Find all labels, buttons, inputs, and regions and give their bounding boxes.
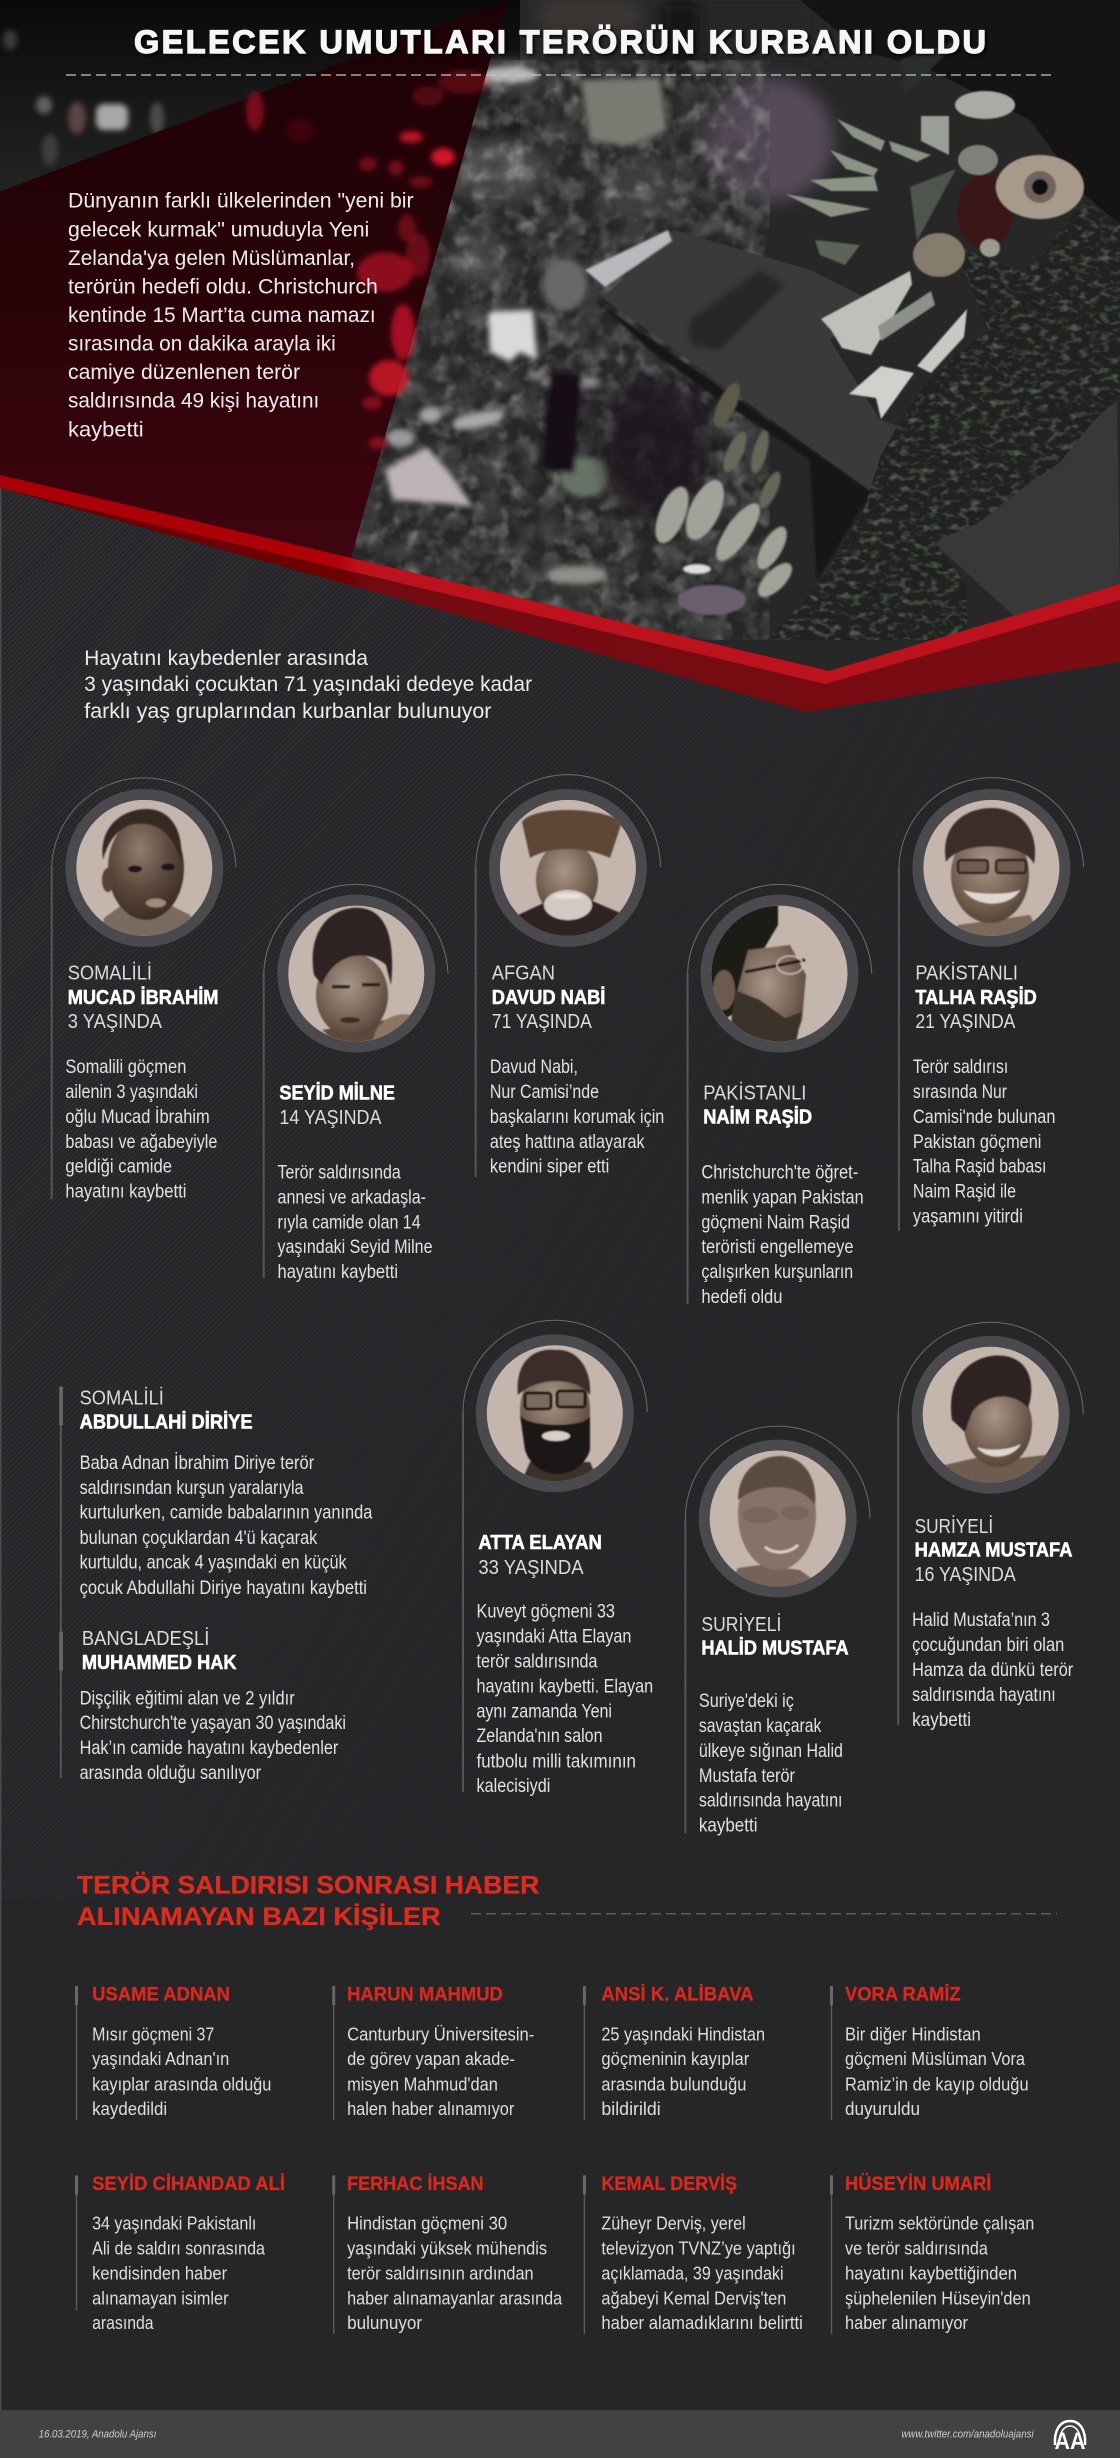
icon: Anadolu Ajansı logo: AA <box>1054 2428 1086 2455</box>
dark railing top right <box>800 0 1120 225</box>
stone bench surface <box>603 230 910 494</box>
description: Hamza Mustafa: Hamza da dünkü terör <box>912 1659 1074 1681</box>
card: Seyid Milne <box>264 884 448 1283</box>
description: Talha Raşid: sırasında Nur <box>913 1081 1007 1103</box>
subheading text: 3 yaşındaki çocuktan 71 yaşındaki dedeye kadar <box>84 673 532 696</box>
intro text block <box>68 190 414 441</box>
missing: Ferhac İhsan: haber alınamayanlar arasında <box>347 2288 563 2308</box>
card: Abdullahi Diriye: ABDULLAHİ DİRİYE <box>80 1410 253 1434</box>
description: Hamza Mustafa: çocuğundan biri olan <box>912 1634 1064 1656</box>
portrait: Mucad İbrahim <box>101 808 192 936</box>
missing: Vora Ramiz: Bir diğer Hindistan <box>845 2024 981 2044</box>
description: Mucad İbrahim: Somalili göçmen <box>65 1056 186 1078</box>
lower red chevron band <box>0 488 1120 712</box>
missing: Kemal Derviş <box>583 2174 803 2334</box>
description: Muhammed Hak: arasında olduğu sanılıyor <box>80 1762 261 1784</box>
footer bar: www.twitter.com/anadoluajansi <box>901 2428 1034 2440</box>
name block: Halid Mustafa <box>701 1613 849 1660</box>
missing: Hüseyin Umari: şüphelenilen Hüseyin'den <box>845 2288 1031 2308</box>
missing: Seyid Cihandad Ali: Ali de saldırı sonrasında <box>92 2238 266 2258</box>
name block: Mucad İbrahim: 3 YAŞINDA <box>68 1011 163 1033</box>
description: Atta Elayan: yaşındaki Atta Elayan <box>476 1626 631 1648</box>
description: Naim Raşid: çalışırken kurşunların <box>701 1261 853 1283</box>
mottled blur texture <box>350 60 770 640</box>
red translucent triangle <box>0 0 507 562</box>
missing: Ansi K. Alibava: bildirildi <box>601 2099 661 2119</box>
description: Abdullahi Diriye <box>80 1451 373 1599</box>
missing: Seyid Cihandad Ali: alınamayan isimler <box>92 2288 229 2308</box>
description: Atta Elayan: aynı zamanda Yeni <box>476 1700 612 1722</box>
description: Naim Raşid: hedefi oldu <box>701 1286 782 1308</box>
subheading text: farklı yaş gruplarından kurbanlar bulunuyor <box>84 700 491 723</box>
name block: Atta Elayan: 33 YAŞINDA <box>478 1557 584 1579</box>
intro text block: kentinde 15 Mart’ta cuma namazı <box>68 304 376 327</box>
fern foliage <box>767 201 1120 640</box>
description: Atta Elayan: futbolu milli takımının <box>476 1750 636 1772</box>
missing: Seyid Cihandad Ali <box>75 2174 285 2333</box>
missing: Ferhac İhsan: bulunuyor <box>347 2313 422 2333</box>
name block: Davud Nabi: 71 YAŞINDA <box>492 1011 592 1033</box>
missing: Ferhac İhsan: FERHAC İHSAN <box>347 2174 484 2195</box>
intro text block: terörün hedefi oldu. Christchurch <box>68 276 378 299</box>
intro text block: gelecek kurmak" umuduyla Yeni <box>68 218 369 242</box>
footer bar <box>0 2410 1120 2458</box>
card: Davud Nabi <box>476 775 664 1178</box>
missing: Harun Mahmud <box>332 1985 534 2120</box>
name block: Halid Mustafa: SURİYELİ <box>701 1613 781 1636</box>
description: Mucad İbrahim: ailenin 3 yaşındaki <box>65 1081 198 1103</box>
portrait: Naim Raşid <box>708 905 806 1048</box>
name block: Mucad İbrahim <box>68 962 218 1033</box>
name block: Atta Elayan <box>478 1532 602 1579</box>
name block: Seyid Milne: SEYİD MİLNE <box>279 1081 395 1104</box>
missing: Harun Mahmud: de görev yapan akade- <box>347 2049 515 2069</box>
portrait: Seyid Milne <box>312 906 410 1042</box>
dark flower mass <box>603 378 707 522</box>
missing: Usame Adnan: Mısır göçmeni 37 <box>92 2024 214 2044</box>
title: GELECEK UMUTLARI TERÖRÜN KURBANI OLDU <box>134 24 986 60</box>
missing: Vora Ramiz: göçmeni Müslüman Vora <box>845 2049 1026 2069</box>
card: Mucad İbrahim <box>52 778 236 1202</box>
missing: Kemal Derviş: açıklamada, 39 yaşındaki <box>601 2264 784 2284</box>
missing: Ansi K. Alibava <box>583 1985 765 2120</box>
upper red chevron band <box>0 475 1120 684</box>
description: Talha Raşid: Pakistan göçmeni <box>913 1131 1041 1153</box>
name block: Mucad İbrahim: MUCAD İBRAHİM <box>68 986 218 1009</box>
description: Abdullahi Diriye: bulunan çoçuklardan 4'ü kaçarak <box>80 1527 318 1549</box>
missing: Seyid Cihandad Ali: SEYİD CİHANDAD ALİ <box>92 2174 285 2195</box>
description: Davud Nabi <box>490 1056 664 1178</box>
missing: Kemal Derviş: haber alamadıklarını belirtti <box>601 2313 803 2333</box>
description: Talha Raşid: yaşamını yitirdi <box>913 1206 1023 1228</box>
description: Halid Mustafa: ülkeye sığınan Halid <box>699 1740 843 1762</box>
name block: Talha Raşid <box>915 962 1037 1033</box>
description: Naim Raşid: menlik yapan Pakistan <box>701 1187 864 1209</box>
missing: Ansi K. Alibava: ANSİ K. ALİBAVA <box>601 1985 754 2006</box>
missing: Harun Mahmud: Canturbury Üniversitesin- <box>347 2024 534 2044</box>
missing: Ferhac İhsan <box>332 2174 563 2334</box>
name block: Atta Elayan: ATTA ELAYAN <box>478 1532 602 1554</box>
description: Halid Mustafa <box>699 1690 843 1837</box>
name block: Hamza Mustafa: 16 YAŞINDA <box>915 1564 1016 1586</box>
gerbera flowers <box>913 145 1084 277</box>
card: Atta Elayan <box>463 1320 653 1797</box>
description: Abdullahi Diriye: kurtuldu, ancak 4 yaşındaki en küçük <box>80 1552 347 1574</box>
missing: Vora Ramiz: VORA RAMİZ <box>845 1985 961 2006</box>
light strip by the bench <box>585 230 672 287</box>
description: Abdullahi Diriye: çocuk Abdullahi Diriye hayatını kaybetti <box>80 1577 367 1599</box>
description: Hamza Mustafa <box>912 1609 1074 1731</box>
portrait: Hamza Mustafa <box>940 1356 1055 1490</box>
name block: Talha Raşid: PAKİSTANLI <box>915 962 1018 985</box>
description: Atta Elayan: kalecisiydi <box>476 1775 550 1797</box>
lily buds upper <box>785 40 1015 265</box>
description: Abdullahi Diriye: Baba Adnan İbrahim Diriye terör <box>80 1451 315 1474</box>
missing: Ferhac İhsan: terör saldırısının ardından <box>347 2264 534 2284</box>
description: Davud Nabi: Nur Camisi’nde <box>490 1081 599 1103</box>
description: Naim Raşid: Christchurch'te öğret- <box>701 1162 858 1184</box>
name block: Seyid Milne: 14 YAŞINDA <box>279 1107 382 1129</box>
missing: Vora Ramiz: Ramiz’in de kayıp olduğu <box>845 2074 1029 2094</box>
description: Davud Nabi: Davud Nabi, <box>490 1056 578 1078</box>
description: Halid Mustafa: Mustafa terör <box>699 1765 795 1787</box>
second bench block <box>935 401 1120 616</box>
intro text block: camiye düzenlenen terör <box>68 361 300 384</box>
name block: Davud Nabi: DAVUD NABİ <box>492 986 605 1009</box>
description: Davud Nabi: ateş hattına atlayarak <box>490 1131 645 1153</box>
description: Seyid Milne: Terör saldırısında <box>278 1162 401 1184</box>
name block: Hamza Mustafa: HAMZA MUSTAFA <box>915 1540 1072 1562</box>
missing: Usame Adnan: USAME ADNAN <box>92 1985 230 2006</box>
description: Atta Elayan: Zelanda'nın salon <box>476 1725 602 1747</box>
missing: Vora Ramiz: duyuruldu <box>845 2099 920 2119</box>
description: Seyid Milne: hayatını kaybetti <box>278 1261 398 1283</box>
description: Davud Nabi: başkalarını korumak için <box>490 1106 664 1128</box>
description: Naim Raşid: teröristi engellemeye <box>701 1236 854 1258</box>
missing: Seyid Cihandad Ali: 34 yaşındaki Pakistanlı <box>92 2214 256 2234</box>
lower lilies <box>649 379 798 615</box>
description: Muhammed Hak: Hak’ın camide hayatını kaybedenler <box>80 1737 339 1759</box>
description: Talha Raşid: Talha Raşid babası <box>913 1156 1046 1178</box>
name block: Hamza Mustafa <box>915 1515 1072 1586</box>
missing: Hüseyin Umari: ve terör saldırısında <box>845 2238 989 2258</box>
subheading text <box>84 647 532 723</box>
section heading: missing people <box>77 1871 1057 1931</box>
description: Seyid Milne: yaşındaki Seyid Milne <box>278 1236 432 1258</box>
card: Muhammed Hak: MUHAMMED HAK <box>82 1652 237 1674</box>
card: Hamza Mustafa <box>898 1322 1083 1731</box>
missing: Ansi K. Alibava: göçmeninin kayıplar <box>601 2049 749 2069</box>
card: Muhammed Hak <box>59 1627 346 1784</box>
blurred keepsakes in middle of the memorial <box>385 68 667 584</box>
section heading: missing people: ALINAMAYAN BAZI KİŞİLER <box>77 1903 441 1931</box>
description: Davud Nabi: kendini siper etti <box>490 1156 609 1178</box>
description: Halid Mustafa: Suriye'deki iç <box>699 1690 794 1712</box>
missing: Ansi K. Alibava: 25 yaşındaki Hindistan <box>601 2024 765 2044</box>
portrait: Talha Raşid <box>944 807 1036 936</box>
missing: Harun Mahmud: HARUN MAHMUD <box>347 1985 503 2006</box>
description: Atta Elayan: Kuveyt göçmeni 33 <box>476 1600 615 1622</box>
missing: Harun Mahmud: misyen Mahmud'dan <box>347 2074 498 2094</box>
intro text block: saldırısında 49 kişi hayatını <box>68 390 319 413</box>
card: Halid Mustafa <box>685 1426 870 1837</box>
white lilies <box>821 271 967 419</box>
portrait: Davud Nabi <box>518 809 622 936</box>
description: Mucad İbrahim: hayatını kaybetti <box>65 1180 186 1202</box>
description: Mucad İbrahim: oğlu Mucad İbrahim <box>65 1105 210 1128</box>
missing: Ferhac İhsan: yaşındaki yüksek mühendis <box>347 2238 547 2258</box>
description: Halid Mustafa: savaştan kaçarak <box>699 1715 822 1737</box>
missing: Harun Mahmud: halen haber alınamıyor <box>347 2099 514 2119</box>
description: Muhammed Hak: Chirstchurch'te yaşayan 30 yaşındaki <box>80 1712 346 1734</box>
footer bar: 16.03.2019, Anadolu Ajansı <box>39 2428 156 2440</box>
name block: Halid Mustafa: HALİD MUSTAFA <box>701 1637 849 1660</box>
missing: Kemal Derviş: Züheyr Derviş, yerel <box>601 2214 746 2234</box>
card: Abdullahi Diriye: SOMALİLİ <box>80 1386 164 1409</box>
portrait: Halid Mustafa <box>725 1456 830 1592</box>
missing: Ansi K. Alibava: arasında bulunduğu <box>601 2074 746 2094</box>
missing: Hüseyin Umari: HÜSEYİN UMARİ <box>845 2174 991 2195</box>
missing: Kemal Derviş: KEMAL DERVİŞ <box>601 2174 737 2195</box>
description: Talha Raşid: Camisi'nde bulunan <box>913 1106 1055 1128</box>
description: Muhammed Hak <box>80 1687 346 1784</box>
description: Hamza Mustafa: kaybetti <box>912 1709 971 1731</box>
description: Mucad İbrahim: babası ve ağabeyiyle <box>65 1131 217 1153</box>
missing: Kemal Derviş: televizyon TVNZ’ye yaptığı <box>601 2238 796 2258</box>
name block: Naim Raşid: PAKİSTANLI <box>703 1081 806 1104</box>
missing: Usame Adnan <box>75 1985 271 2120</box>
name block: Talha Raşid: TALHA RAŞİD <box>915 986 1037 1009</box>
bench shadow <box>596 301 874 580</box>
description: Seyid Milne <box>278 1162 432 1283</box>
intro text block: Zelanda'ya gelen Müslümanlar, <box>68 247 355 270</box>
missing: Vora Ramiz <box>830 1985 1029 2120</box>
description: Abdullahi Diriye: kurtulurken, camide babalarının yanında <box>80 1502 373 1524</box>
missing: Usame Adnan: kaydedildi <box>92 2099 167 2119</box>
description: Hamza Mustafa: saldırısında hayatını <box>912 1684 1056 1706</box>
name block: Davud Nabi <box>492 963 605 1033</box>
description: Seyid Milne: rıyla camide olan 14 <box>278 1212 421 1234</box>
red flecks <box>246 70 490 449</box>
name block: Naim Raşid: NAİM RAŞİD <box>703 1106 812 1129</box>
description: Halid Mustafa: saldırısında hayatını <box>699 1790 842 1812</box>
description: Mucad İbrahim: geldiği camide <box>65 1156 172 1178</box>
name block: Naim Raşid <box>703 1081 812 1129</box>
missing: Usame Adnan: yaşındaki Adnan'ın <box>92 2049 229 2069</box>
intro text block: Dünyanın farklı ülkelerinden "yeni bir <box>68 190 414 212</box>
card: Abdullahi Diriye <box>59 1386 373 1632</box>
description: Seyid Milne: annesi ve arkadaşla- <box>278 1187 426 1209</box>
description: Halid Mustafa: kaybetti <box>699 1815 758 1837</box>
card: Talha Raşid <box>899 778 1084 1231</box>
missing: Usame Adnan: kayıplar arasında olduğu <box>92 2074 271 2094</box>
description: Muhammed Hak: Dişçilik eğitimi alan ve 2 yıldır <box>80 1687 295 1709</box>
description: Hamza Mustafa: Halid Mustafa’nın 3 <box>912 1609 1050 1631</box>
intro text block: kaybetti <box>68 418 144 441</box>
missing: Kemal Derviş: ağabeyi Kemal Derviş'ten <box>601 2288 786 2308</box>
missing: Hüseyin Umari: haber alınamıyor <box>845 2313 968 2333</box>
name block: Mucad İbrahim: SOMALİLİ <box>68 962 152 985</box>
intro text block: sırasında on dakika arayla iki <box>68 332 336 356</box>
name block: Hamza Mustafa: SURİYELİ <box>915 1515 993 1538</box>
portrait: Atta Elayan <box>518 1350 600 1485</box>
description: Atta Elayan: terör saldırısında <box>476 1650 598 1672</box>
description: Naim Raşid <box>701 1162 864 1308</box>
description: Atta Elayan: hayatını kaybetti. Elayan <box>476 1676 653 1698</box>
card: Naim Raşid <box>688 884 872 1308</box>
subheading text: Hayatını kaybedenler arasında <box>84 647 368 670</box>
name block: Seyid Milne <box>279 1081 395 1129</box>
description: Talha Raşid: Terör saldırısı <box>913 1056 1008 1078</box>
missing: Hüseyin Umari: Turizm sektöründe çalışan <box>845 2214 1034 2234</box>
missing: Ferhac İhsan: Hindistan göçmeni 30 <box>347 2214 507 2234</box>
hero photo: memorial flowers <box>0 0 1120 700</box>
name block: Davud Nabi: AFGAN <box>492 963 555 985</box>
missing: Hüseyin Umari <box>830 2174 1034 2334</box>
missing: Hüseyin Umari: hayatını kaybettiğinden <box>845 2264 1017 2284</box>
description: Abdullahi Diriye: saldırısından kurşun yaralarıyla <box>80 1477 304 1499</box>
description: Talha Raşid: Naim Raşid ile <box>913 1180 1016 1202</box>
description: Mucad İbrahim <box>65 1056 217 1202</box>
description: Atta Elayan <box>476 1600 653 1797</box>
missing: Seyid Cihandad Ali: arasında <box>92 2313 154 2333</box>
description: Naim Raşid: göçmeni Naim Raşid <box>701 1212 850 1234</box>
name block: Talha Raşid: 21 YAŞINDA <box>915 1011 1016 1033</box>
section heading: missing people: TERÖR SALDIRISI SONRASI HABER <box>77 1871 539 1900</box>
missing: Seyid Cihandad Ali: kendisinden haber <box>92 2264 227 2284</box>
description: Talha Raşid <box>913 1056 1055 1228</box>
card: Muhammed Hak: BANGLADEŞLİ <box>82 1627 209 1650</box>
